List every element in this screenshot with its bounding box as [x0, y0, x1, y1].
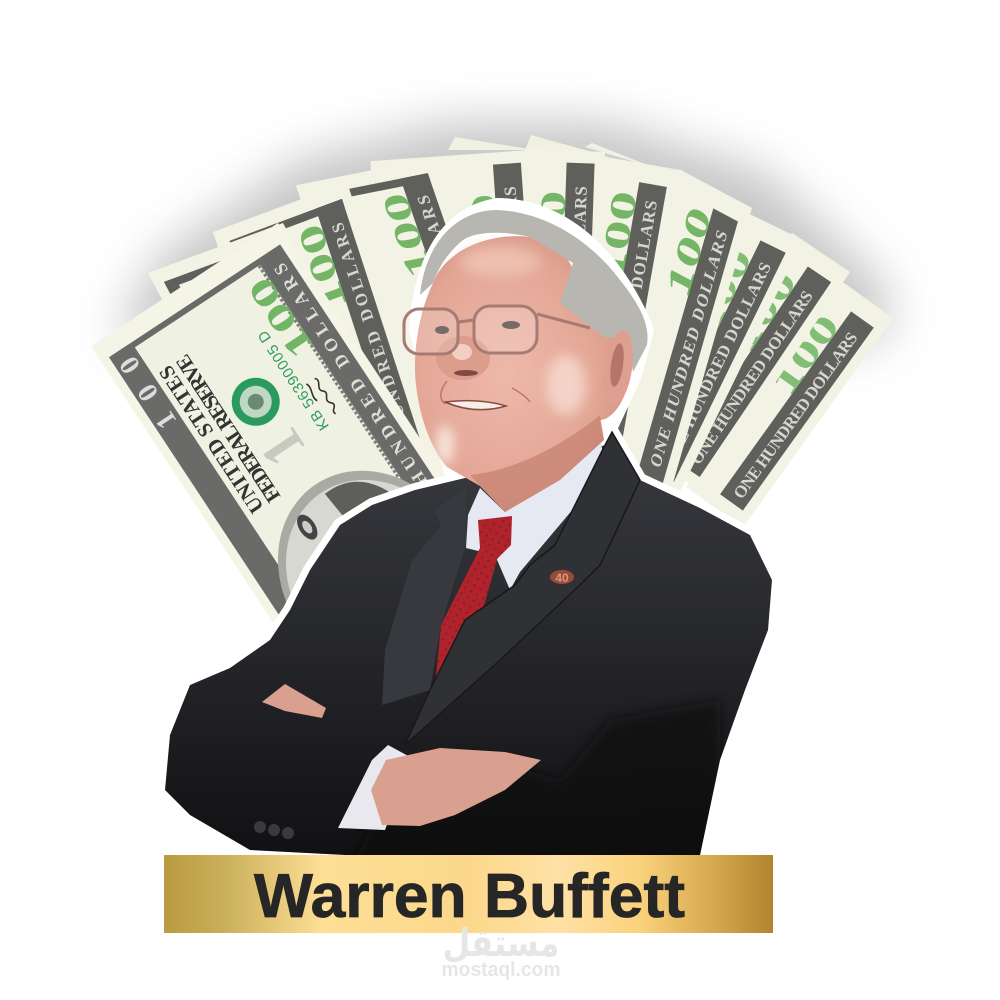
neck and face	[415, 236, 630, 512]
lapel pin	[550, 570, 574, 585]
bill 7 center	[370, 150, 551, 460]
name banner	[164, 855, 773, 933]
jacket buttons	[254, 821, 294, 839]
watermark	[442, 921, 560, 981]
neck shading	[470, 415, 604, 512]
bill 7 center: ONE HUNDRED DOLLARS	[501, 186, 536, 422]
right lapel	[405, 432, 640, 745]
name text: Warren Buffett	[254, 862, 685, 931]
bill 1 right	[686, 277, 893, 528]
watermark: mostaql.com	[442, 959, 560, 981]
bill 9 left: 100	[290, 219, 355, 317]
bill 5 right: 100	[590, 188, 645, 283]
suit jacket	[165, 432, 772, 855]
bill 8 left: 100	[373, 190, 442, 282]
bill 9 left	[213, 182, 452, 555]
lapel pin: 40	[555, 571, 569, 585]
bill 6 center: 100	[530, 190, 574, 280]
hair	[420, 210, 648, 372]
bill 1 right: 100	[763, 307, 847, 403]
front large bill: UNITED STATES	[154, 361, 269, 518]
bill 4 right: ONE HUNDRED DOLLARS	[647, 227, 731, 471]
eyes	[435, 321, 520, 334]
drop shadow behind the bills	[115, 122, 890, 420]
bill 4 right	[594, 169, 752, 506]
forearm hand	[371, 748, 541, 826]
bill 8 left	[296, 158, 544, 507]
treasury seal	[222, 369, 289, 435]
bill 2 right	[644, 233, 850, 492]
nose	[436, 336, 490, 380]
cheek and chin highlights	[436, 247, 586, 465]
fan of hundred dollar bills	[91, 135, 893, 723]
bill 5 right: ONE HUNDRED DOLLARS	[602, 199, 661, 434]
shirt cuff	[338, 745, 412, 830]
bill 2 right: 100	[722, 263, 805, 359]
signature	[305, 378, 339, 419]
bill 7 center: 100	[463, 192, 509, 284]
portrait oval	[278, 470, 410, 602]
bill 3 right: 100	[685, 242, 760, 340]
federal reserve lettering: FEDERAL RESERVE	[171, 350, 285, 507]
bill 1 right: ONE HUNDRED DOLLARS	[730, 329, 861, 502]
bill 4 right: 100	[659, 199, 719, 304]
ghost numeral: 1	[247, 417, 318, 478]
bill 3 right: ONE HUNDRED DOLLARS	[659, 259, 775, 470]
bill 6 center: ONE HUNDRED DOLLARS	[564, 186, 591, 421]
green 100: 100	[239, 270, 322, 366]
white cut-out outline	[165, 205, 772, 855]
portrait of Warren Buffett	[165, 205, 772, 870]
serial number: KB 56390005 D	[255, 327, 333, 433]
glasses	[404, 306, 590, 354]
bill 9 left: ONE HUNDRED DOLLARS	[328, 220, 431, 488]
left lapel	[382, 488, 466, 705]
folded hand	[262, 684, 326, 718]
bill 8 left: ONE HUNDRED DOLLARS	[413, 194, 521, 457]
front large bill	[91, 223, 434, 622]
ear	[599, 328, 637, 408]
shirt collar	[466, 438, 606, 590]
back bill tips	[448, 135, 655, 168]
band text: ONE HUNDRED DOLLARS	[270, 259, 468, 546]
bill 3 right	[613, 209, 803, 501]
bill 6 center	[515, 149, 605, 452]
bill 10 left	[148, 223, 377, 450]
bill 5 right	[549, 156, 680, 465]
bill 2 right: ONE HUNDRED DOLLARS	[686, 287, 817, 468]
corner numerals: 100	[113, 350, 183, 434]
necktie	[435, 516, 512, 685]
jacket shadows and folds	[486, 700, 726, 855]
smile	[441, 381, 530, 410]
watermark: مستقل	[442, 921, 560, 965]
